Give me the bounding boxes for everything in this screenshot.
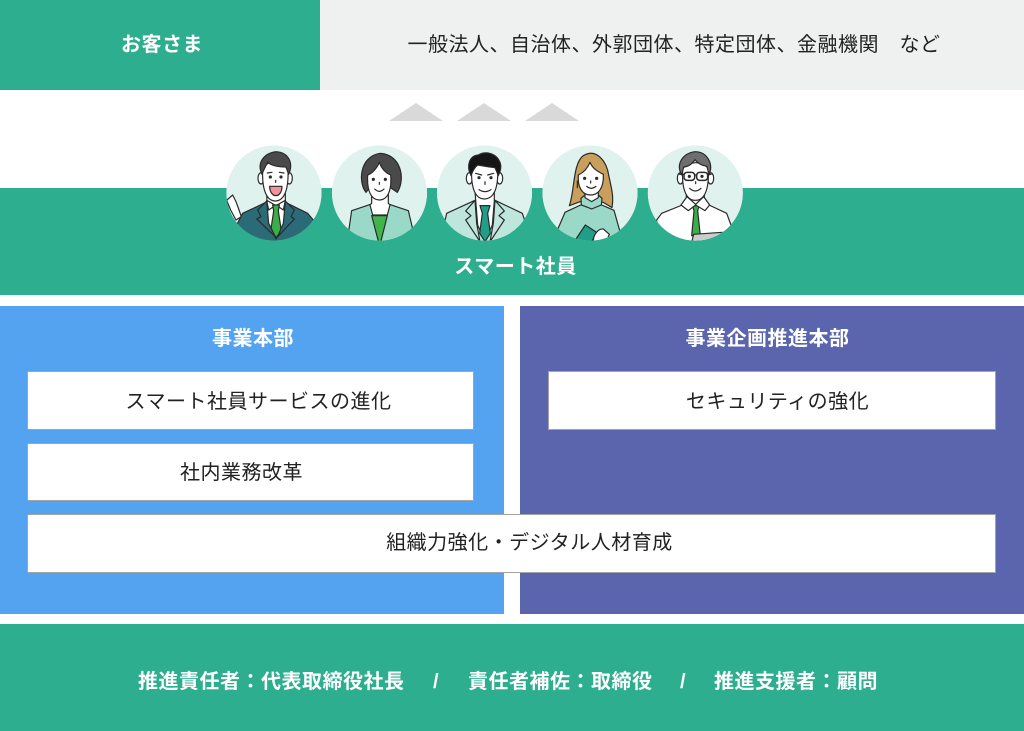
box: smart employee service evolution xyxy=(27,371,474,430)
promotion lead: 推進責任者：代表取締役社長 xyxy=(138,670,404,692)
upward arrow 1 xyxy=(389,103,443,121)
upward arrows and staff portraits xyxy=(226,103,743,241)
box: security enhancement: セキュリティの強化 xyxy=(686,391,869,413)
panel: business planning division xyxy=(520,306,1024,614)
customer header band xyxy=(0,0,1024,90)
portrait 5: man with glasses in white shirt xyxy=(648,145,743,245)
portrait 1: cheering man in dark suit xyxy=(226,145,322,245)
portrait 2: woman with short dark hair xyxy=(332,145,427,245)
smart employee label: スマート社員 xyxy=(454,256,577,278)
portrait 3: man in light suit xyxy=(437,145,532,245)
separator slash 1: / xyxy=(433,670,439,692)
upward arrow 2 xyxy=(457,103,511,121)
customer label panel xyxy=(0,0,320,90)
customer types text: 一般法人、自治体、外郭団体、特定団体、金融機関 など xyxy=(408,34,940,56)
customer label: お客さま xyxy=(121,34,203,56)
upward arrow 3 xyxy=(525,103,579,121)
box: organization strength and digital talent: 組織力強化・デジタル人材育成 xyxy=(386,532,673,554)
panel: business division xyxy=(0,306,504,614)
box: security enhancement xyxy=(548,371,996,430)
portrait 4: woman with long brown hair xyxy=(542,145,638,245)
assistant lead: 責任者補佐：取締役 xyxy=(468,670,652,692)
business planning heading: 事業企画推進本部 xyxy=(686,328,850,350)
box: organization strength and digital talent xyxy=(27,514,996,572)
smart employee green band xyxy=(0,188,1024,295)
business division heading: 事業本部 xyxy=(212,328,294,350)
separator slash 2: / xyxy=(680,670,686,692)
box: smart employee service evolution: スマート社員サービスの進化 xyxy=(126,391,391,413)
box: internal business reform xyxy=(27,442,474,501)
promotion supporter: 推進支援者：顧問 xyxy=(714,670,878,692)
promotion structure footer band xyxy=(0,624,1024,731)
box: internal business reform: 社内業務改革 xyxy=(180,462,303,484)
